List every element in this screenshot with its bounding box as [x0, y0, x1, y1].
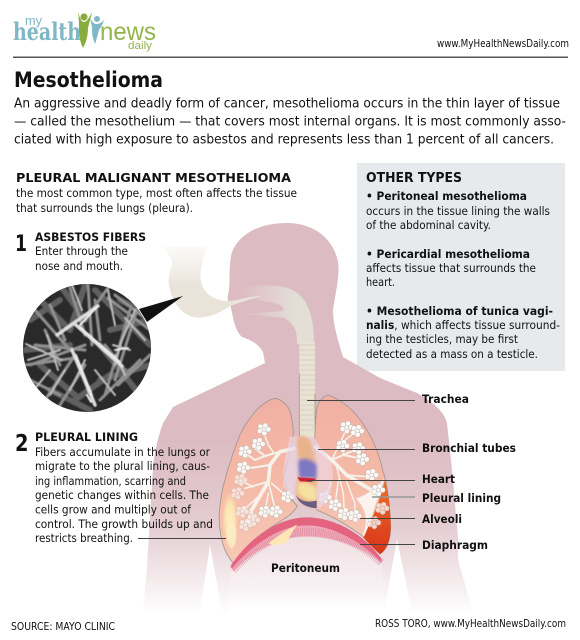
pleural section heading [16, 170, 297, 215]
label: diaphragm: Diaphragm [422, 538, 488, 552]
pleural lining tumor [363, 479, 391, 554]
title: Mesothelioma [14, 68, 163, 92]
trachea [299, 342, 315, 437]
smoke: inhaled fibers [163, 247, 262, 318]
step 1: asbestos fibers: nose and mouth. [35, 259, 123, 273]
other types text: • Peritoneal mesothelioma [366, 189, 527, 203]
logo: My Health News Daily: news [100, 18, 156, 46]
step 1: asbestos fibers: Enter through the [35, 244, 128, 258]
other types text: nalis, which affects tissue surround- [366, 318, 560, 332]
label: bronchial tubes: Bronchial tubes [422, 441, 516, 455]
left lung [219, 398, 297, 563]
panel: other types background [357, 163, 565, 371]
step 2: pleural lining: control. The growth builds up and [35, 517, 213, 531]
step 1: asbestos fibers [15, 231, 146, 273]
pointer to magnified fibers [139, 296, 183, 322]
other types text: affects tissue that surrounds the [366, 261, 536, 275]
pleural lining highlight [356, 478, 384, 537]
logo: My Health News Daily: health [13, 17, 81, 46]
logo: My Health News Daily: daily [128, 40, 153, 52]
right lung [314, 395, 391, 554]
organs group [219, 342, 391, 613]
pleural section heading: that surrounds the lungs (pleura). [16, 201, 193, 215]
step 1: asbestos fibers: ASBESTOS FIBERS [35, 231, 146, 244]
peritoneum cavity [227, 533, 387, 613]
source credit: SOURCE: MAYO CLINIC [11, 621, 115, 633]
micrograph: asbestos fibers [23, 284, 151, 412]
logo: My Health News Daily: my [25, 13, 42, 28]
leader lines [138, 400, 415, 544]
other types text: OTHER TYPES [366, 171, 462, 186]
other types text: • Mesothelioma of tunica vagi- [366, 304, 553, 318]
step 2: pleural lining: genetic changes within cells. The [35, 488, 209, 502]
other types text: of the abdominal cavity. [366, 218, 491, 232]
other types text: detected as a mass on a testicle. [366, 347, 538, 361]
other types text: ing the testicles, may be first [366, 332, 518, 346]
label: pleural lining: Pleural lining [422, 491, 501, 505]
intro paragraph [14, 96, 566, 148]
other types text: occurs in the tissue lining the walls [366, 204, 550, 218]
nasal airway [245, 286, 314, 344]
other types text [366, 171, 560, 361]
cancer patch: lung [222, 490, 238, 550]
label: trachea: Trachea [422, 392, 469, 406]
pleural section heading: the most common type, most often affects the tissue [16, 186, 297, 200]
pleural section heading: PLEURAL MALIGNANT MESOTHELIOMA [16, 170, 291, 185]
step 2: pleural lining: 2 [15, 431, 28, 457]
label: peritoneum: Peritoneum [271, 561, 340, 575]
other types text: • Pericardial mesothelioma [366, 247, 530, 261]
step 2: pleural lining: restricts breathing. [35, 531, 133, 545]
step 2: pleural lining: cells grow and multiply out of [35, 502, 192, 516]
step 2: pleural lining: PLEURAL LINING [35, 431, 138, 444]
label: alveoli: Alveoli [422, 512, 462, 526]
bronchial tubes [240, 428, 377, 525]
header rule [13, 56, 568, 58]
other types text: heart. [366, 275, 395, 289]
step 2: pleural lining [15, 431, 213, 545]
label: heart: Heart [422, 472, 455, 486]
step 2: pleural lining: migrate to the plural lining, caus- [35, 459, 210, 473]
step 2: pleural lining: ing inflammation, scarring and [35, 474, 186, 488]
step 1: asbestos fibers: 1 [15, 232, 27, 257]
step 2: pleural lining: Fibers accumulate in the lungs or [35, 445, 210, 459]
logo: My Health News Daily [13, 12, 156, 52]
body silhouette [143, 223, 473, 612]
alveoli [231, 421, 389, 531]
heart [283, 436, 333, 509]
diaphragm [231, 517, 382, 572]
